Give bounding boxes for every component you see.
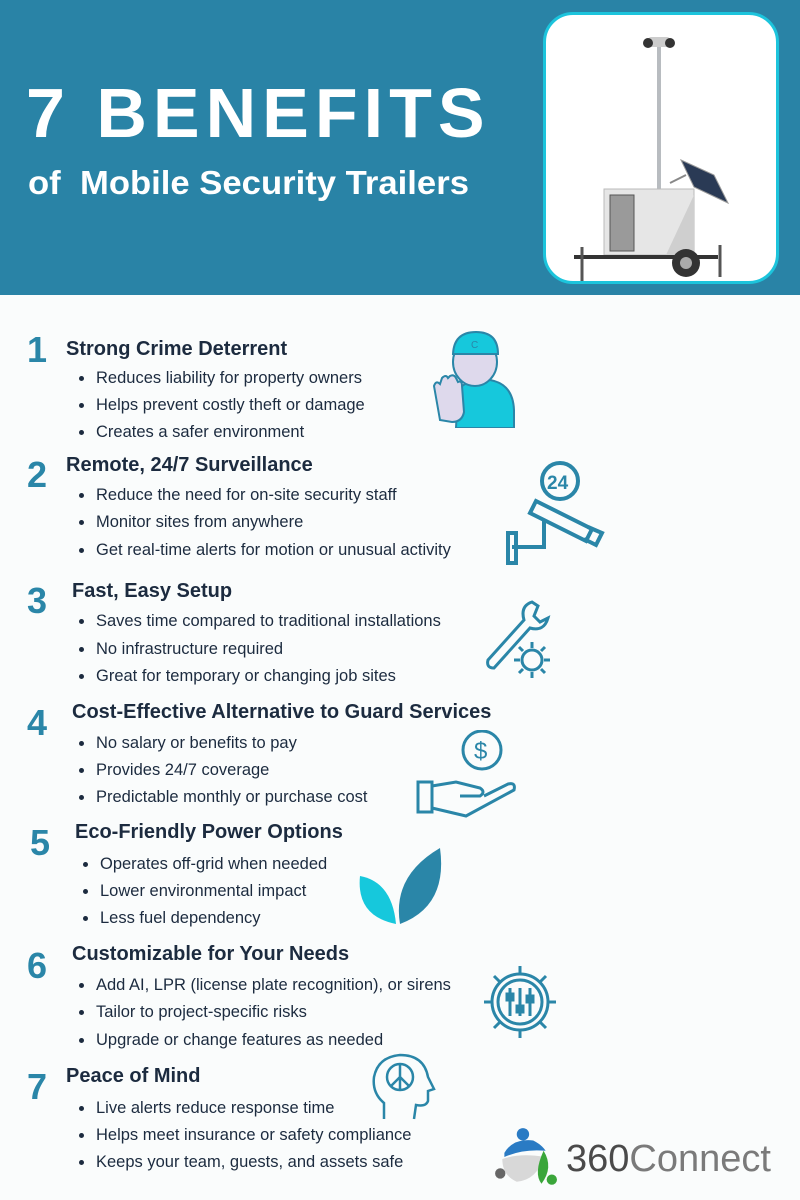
bullets 3: No infrastructure required (96, 640, 283, 658)
bullets 3: Great for temporary or changing job sites (96, 667, 396, 685)
bullets 4 (79, 734, 368, 806)
panel: benefit 4 (27, 701, 516, 818)
icon: wrench and gear (486, 600, 550, 678)
header banner (0, 0, 800, 295)
heading 1: Strong Crime Deterrent (66, 338, 287, 360)
heading 3: Fast, Easy Setup (72, 580, 232, 602)
bullets 1: Creates a safer environment (96, 423, 304, 441)
panel: benefit 5 (30, 821, 442, 927)
bullets 5: Less fuel dependency (100, 909, 261, 927)
icon: hand with coin (416, 730, 516, 818)
icon: 24h camera: 24 (547, 473, 569, 494)
bullets 7: Helps meet insurance or safety compliance (96, 1126, 411, 1144)
panel: benefit 6 (27, 943, 556, 1049)
icon: guard with stop hand (433, 331, 515, 428)
bullets 4: Provides 24/7 coverage (96, 761, 269, 779)
bullets 5 (83, 855, 327, 927)
bullets 1: Helps prevent costly theft or damage (96, 396, 365, 414)
icon: head with peace sign (372, 1054, 436, 1120)
number 2: 2 (27, 454, 47, 495)
panel: benefit 2 (27, 454, 605, 565)
bullets 3: Saves time compared to traditional installations (96, 612, 441, 630)
logo: 360Connect: 360Connect (566, 1138, 771, 1180)
number 3: 3 (27, 580, 47, 621)
bullets 2: Get real-time alerts for motion or unusual activity (96, 541, 451, 559)
bullets 2 (79, 486, 451, 559)
number 4: 4 (27, 702, 47, 743)
heading 4: Cost-Effective Alternative to Guard Services (72, 701, 491, 723)
icon: 24h camera (506, 461, 605, 565)
icon: guard with stop hand: C (471, 340, 478, 351)
subtitle: of Mobile Security Trailers (28, 164, 469, 201)
bullets 1 (79, 369, 365, 441)
bullets 7: Live alerts reduce response time (96, 1099, 334, 1117)
bullets 2: Reduce the need for on-site security staff (96, 486, 397, 504)
heading 5: Eco-Friendly Power Options (75, 821, 343, 843)
heading 6: Customizable for Your Needs (72, 943, 349, 965)
bullets 6 (79, 976, 451, 1049)
number 1: 1 (27, 329, 47, 370)
bullets 4: No salary or benefits to pay (96, 734, 297, 752)
bullets 5: Lower environmental impact (100, 882, 306, 900)
bullets 1: Reduces liability for property owners (96, 369, 362, 387)
number 5: 5 (30, 822, 50, 863)
number 7: 7 (27, 1066, 47, 1107)
logo: 360Connect (495, 1128, 771, 1185)
bullets 3 (79, 612, 441, 685)
bullets 4: Predictable monthly or purchase cost (96, 788, 367, 806)
photo: security trailer (543, 12, 779, 284)
bullets 6: Add AI, LPR (license plate recognition), or sirens (96, 976, 451, 994)
bullets 7 (79, 1099, 411, 1171)
panel: benefit 7 (27, 1054, 436, 1171)
icon: settings gear with sliders (484, 966, 556, 1038)
heading 2: Remote, 24/7 Surveillance (66, 454, 313, 476)
bullets 5: Operates off-grid when needed (100, 855, 327, 873)
bullets 6: Tailor to project-specific risks (96, 1003, 307, 1021)
heading 7: Peace of Mind (66, 1065, 200, 1087)
icon: hand with coin: $ (474, 738, 487, 765)
number 6: 6 (27, 945, 47, 986)
bullets 7: Keeps your team, guests, and assets safe (96, 1153, 403, 1171)
panel: benefit 1 (27, 329, 515, 441)
panel: benefit 3 (27, 580, 550, 685)
bullets 2: Monitor sites from anywhere (96, 513, 303, 531)
icon: leaves (360, 848, 442, 924)
title: 7 BENEFITS (26, 74, 491, 152)
bullets 6: Upgrade or change features as needed (96, 1031, 383, 1049)
